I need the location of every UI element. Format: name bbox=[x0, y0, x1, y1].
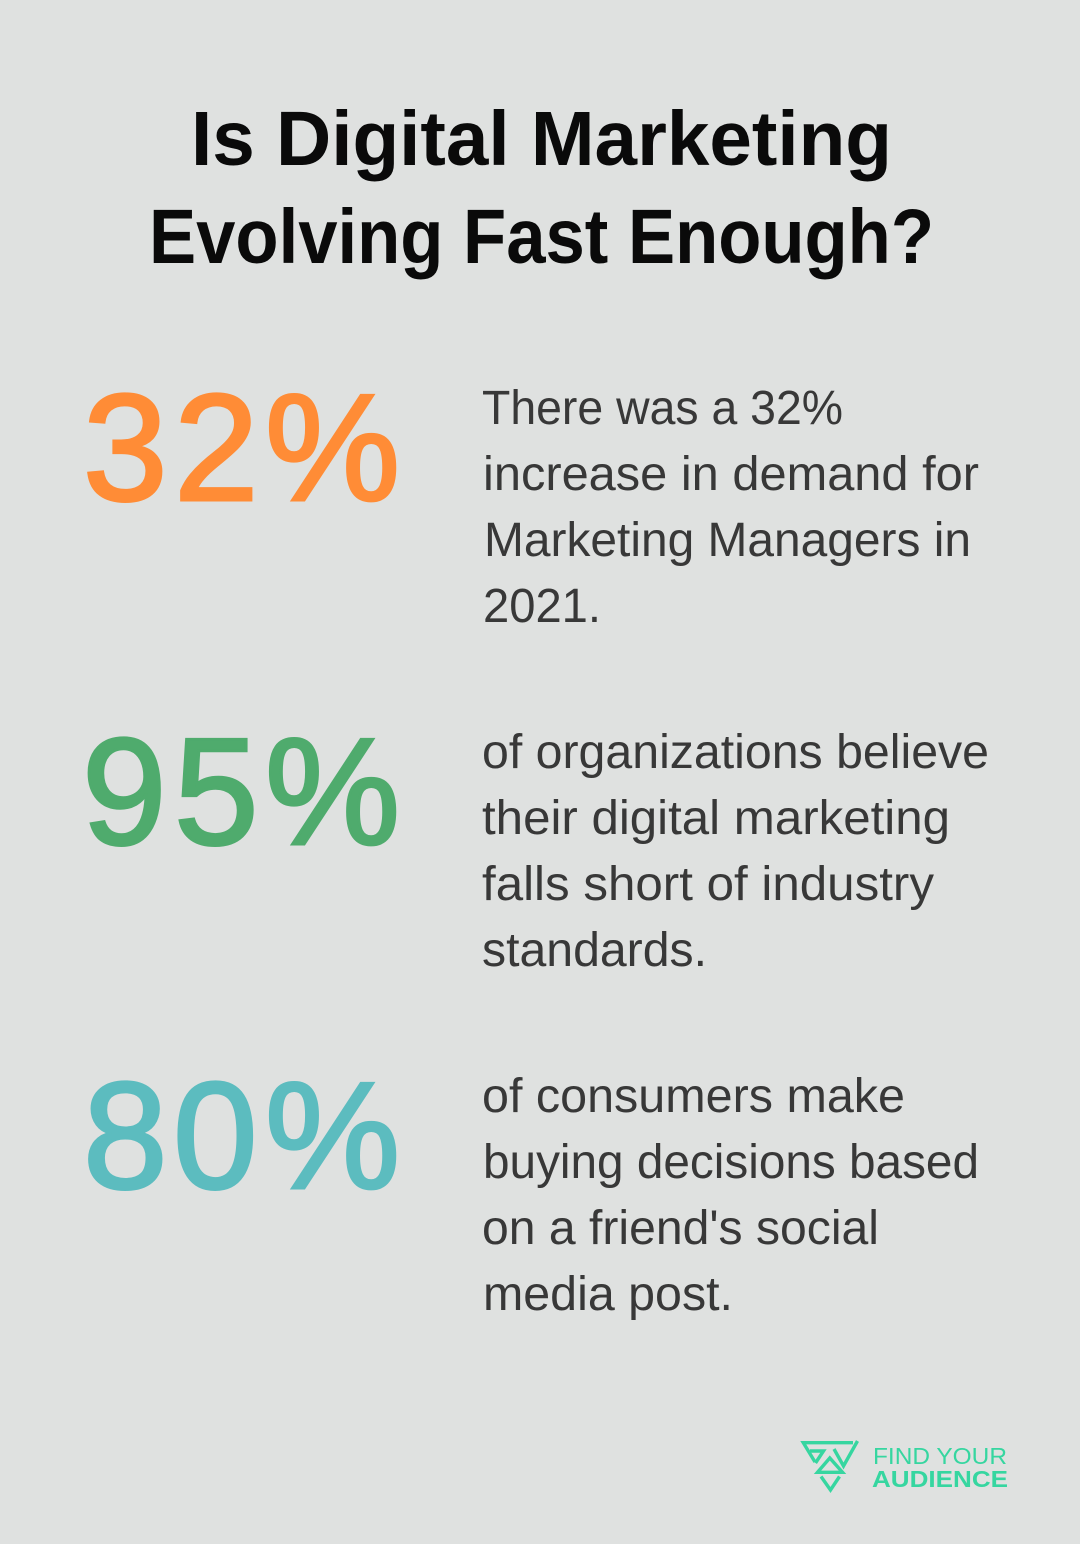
text block: 32% description bbox=[482, 382, 979, 633]
text block: 32% description: There was a 32% bbox=[482, 382, 843, 435]
text block: 80% description: media post. bbox=[483, 1268, 733, 1321]
text block: 95% description: standards. bbox=[482, 924, 707, 977]
panel: 80% statistic bbox=[83, 1051, 979, 1321]
text block: 32% description: 2021. bbox=[483, 580, 601, 633]
big number: 80%: 80% bbox=[83, 1051, 400, 1221]
big number: 32%: 32% bbox=[83, 363, 400, 533]
title bbox=[149, 96, 934, 280]
icon: triangular logo mark bbox=[803, 1441, 858, 1490]
text block: 80% description: buying decisions based bbox=[483, 1136, 979, 1189]
title: Evolving Fast Enough? bbox=[149, 194, 934, 280]
logo: Find Your Audience bbox=[803, 1441, 1008, 1492]
text block: 95% description: of organizations believe bbox=[482, 726, 989, 779]
text block: 32% description: increase in demand for bbox=[483, 448, 979, 501]
text block: 80% description bbox=[482, 1070, 979, 1321]
text block: 32% description: Marketing Managers in bbox=[484, 514, 971, 567]
text block: 95% description: their digital marketing bbox=[482, 792, 950, 845]
panel: 32% statistic bbox=[83, 363, 979, 633]
big number: 95%: 95% bbox=[82, 707, 400, 877]
wordmark: AUDIENCE bbox=[872, 1466, 1008, 1492]
text block: 95% description: falls short of industry bbox=[482, 858, 934, 911]
text block: 95% description bbox=[482, 726, 989, 977]
wordmark bbox=[872, 1443, 1008, 1492]
text block: 80% description: of consumers make bbox=[482, 1070, 905, 1123]
text block: 80% description: on a friend's social bbox=[482, 1202, 879, 1255]
title: Is Digital Marketing bbox=[191, 96, 892, 182]
wordmark: FIND YOUR bbox=[873, 1443, 1007, 1469]
panel: 95% statistic bbox=[82, 707, 989, 977]
